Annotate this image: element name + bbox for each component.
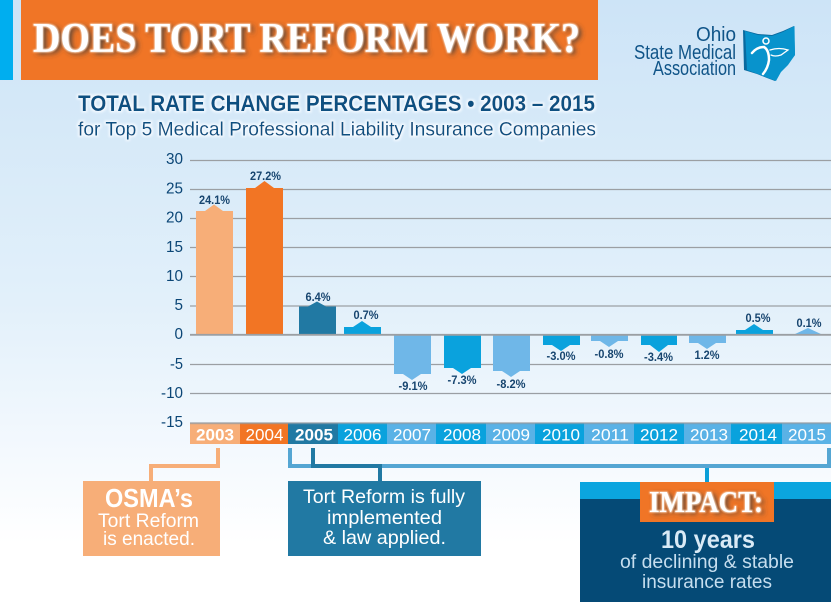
- connector: 2005 to Tort Reform callout: [311, 448, 382, 481]
- logo: Ohio State Medical Association: State Medical: [634, 42, 736, 64]
- callout: Tort Reform is fully implemented: Tort Reform is fully: [303, 486, 465, 508]
- chart heading: [78, 91, 596, 140]
- impact badge: IMPACT:: [649, 484, 763, 519]
- year strip: 2006: [344, 426, 382, 444]
- data labels: 6.4%: [306, 292, 330, 304]
- y axis labels: [161, 151, 183, 431]
- connector: bracket to impact panel: [705, 468, 709, 483]
- connector: 2003 to OSMA callout: [149, 448, 220, 481]
- title banner: [21, 0, 598, 80]
- logo: Ohio State Medical Association: [634, 24, 795, 81]
- data labels: 0.5%: [746, 313, 770, 325]
- callout: Tort Reform is fully implemented: [288, 481, 481, 556]
- year strip: 2011: [591, 426, 629, 444]
- bracket: 2005 to 2015: [288, 448, 831, 468]
- year strip: 2014: [739, 426, 777, 444]
- chart heading: for Top 5 Medical Professional Liability Insurance Companies: [78, 118, 596, 140]
- data labels: 0.7%: [354, 310, 378, 322]
- callout: OSMA's Tort Reform is enacted: [83, 481, 220, 556]
- title banner: DOES TORT REFORM WORK?: [33, 15, 580, 62]
- year strip: 2013: [690, 426, 728, 444]
- panel: impact: insurance rates: [642, 572, 772, 593]
- data labels: 0.1%: [796, 318, 822, 330]
- year strip: 2015: [788, 426, 826, 444]
- y axis labels: -5: [170, 356, 183, 373]
- header accent bar: [0, 0, 13, 80]
- year strip: 2003: [196, 426, 234, 444]
- bars: [196, 181, 822, 380]
- data labels: -7.3%: [448, 375, 476, 387]
- data labels: -0.8%: [594, 349, 624, 361]
- callout: OSMA's Tort Reform is enacted: is enacted.: [103, 529, 195, 550]
- y axis labels: 20: [166, 210, 183, 226]
- callout: OSMA's Tort Reform is enacted: Tort Reform: [98, 511, 199, 532]
- y axis labels: -15: [161, 414, 183, 431]
- data labels: -3.4%: [644, 352, 673, 364]
- y axis labels: 5: [174, 297, 183, 314]
- panel: impact: [580, 482, 831, 602]
- panel: impact: 10 years: [661, 526, 755, 554]
- year strip: 2012: [640, 426, 678, 444]
- data labels: 24.1%: [199, 195, 230, 207]
- year strip: [190, 423, 831, 444]
- callout: Tort Reform is fully implemented: & law applied.: [323, 527, 446, 549]
- data labels: 1.2%: [694, 350, 720, 362]
- y axis labels: 0: [174, 326, 183, 343]
- data labels: -9.1%: [398, 381, 428, 393]
- callout: Tort Reform is fully implemented: implemented: [327, 507, 442, 529]
- data labels: 27.2%: [250, 171, 281, 183]
- year strip: 2009: [492, 426, 530, 444]
- data labels: -8.2%: [496, 379, 526, 391]
- bar chart: [161, 151, 831, 431]
- y axis labels: 25: [166, 180, 183, 198]
- y axis labels: 15: [166, 239, 183, 256]
- callout: OSMA's Tort Reform is enacted: OSMA’s: [105, 483, 193, 513]
- year strip: 2007: [393, 426, 431, 444]
- year strip: 2004: [246, 426, 284, 444]
- data labels: [199, 171, 822, 393]
- logo: Ohio State Medical Association: Ohio: [696, 24, 736, 46]
- panel: impact: of declining & stable: [620, 552, 794, 573]
- chart heading: TOTAL RATE CHANGE PERCENTAGES • 2003 – 2015: [78, 91, 595, 116]
- y axis labels: 10: [166, 268, 183, 285]
- y axis labels: 30: [166, 151, 183, 168]
- year strip: 2005: [295, 426, 333, 444]
- data labels: -3.0%: [546, 351, 576, 363]
- year strip: 2010: [542, 426, 580, 444]
- y axis labels: -10: [161, 385, 183, 402]
- logo: Ohio State Medical Association: Association: [653, 58, 736, 80]
- year strip: 2008: [443, 426, 481, 444]
